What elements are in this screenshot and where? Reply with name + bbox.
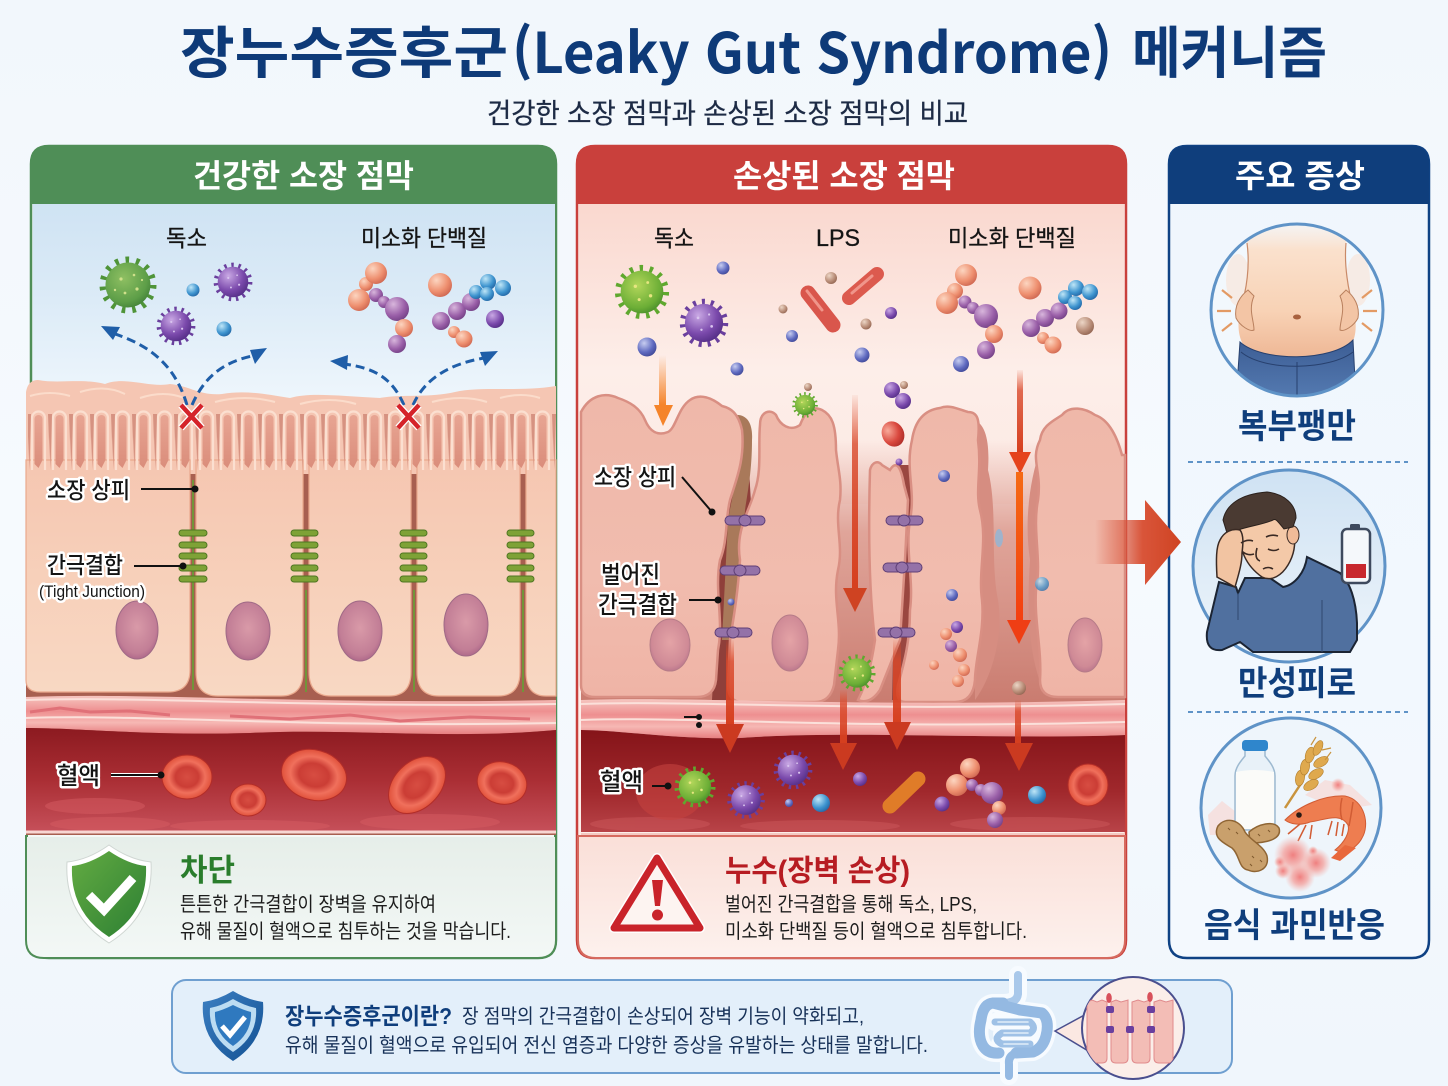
text: definition: 장 점막의 간극결합이 손상되어 장벽 기능이 약화되고, [462,1005,864,1028]
green tight strand [193,480,523,692]
pink background [579,204,1124,504]
hand [1216,529,1243,587]
layers [26,696,556,734]
illustration: abdominal bloating [1211,222,1383,400]
panel: definition [172,975,1232,1079]
panel frame [31,146,556,958]
label: toxin: 독소 [654,225,694,251]
icon: blocked X marks [181,405,419,428]
heading: symptoms [1169,146,1429,204]
label: bloating: 복부팽만 [1238,408,1356,446]
label: fatigue: 만성피로 [1238,665,1356,703]
panel frame [1169,146,1429,958]
cells [26,460,556,696]
labels: damaged diagram [594,464,722,796]
nuclei [116,594,488,661]
subtitle: 건강한 소장 점막과 손상된 소장 점막의 비교 [487,98,968,129]
particles in junction and blood [636,657,1108,828]
text: definition: 유해 물질이 혈액으로 유입되어 전신 염증과 다양한 증상을 유발하는 상태를 말합니다. [285,1034,928,1057]
tight junctions: healthy [179,530,534,582]
panel: major symptoms [1169,146,1429,958]
title [180,9,1327,90]
blood vessel [581,730,1125,832]
text: definition: 장누수증후군이란? [285,1003,452,1029]
icon: green shield [67,845,151,943]
microvilli [28,404,556,470]
icon: blue shield [203,991,263,1061]
labels: damaged diagram: 소장 상피 [594,464,676,490]
text: block description: 유해 물질이 혈액으로 침투하는 것을 막습니다. [180,920,511,943]
text: leakage description [725,893,1027,943]
labels: healthy diagram [39,477,198,790]
battery [1342,524,1370,583]
title: 장누수증후군 [180,9,508,90]
blood vessel [26,728,556,832]
panel: healthy small intestine mucosa [26,146,556,958]
labels: damaged diagram: 벌어진 [601,562,660,589]
heading: healthy [31,146,556,204]
shrimp [1285,796,1366,861]
icon: magnified callout [1055,977,1184,1079]
panel: damaged small intestine mucosa [577,146,1126,958]
text: definition [285,1003,928,1057]
labels: damaged diagram: 간극결합 [598,592,677,619]
proteins above damaged wall [929,264,1098,687]
label: undigested protein: 미소화 단백질 [948,225,1076,251]
text: block description [180,893,511,943]
callout: blocked [26,836,556,958]
sky background [33,204,555,399]
hair [1223,492,1296,533]
tissue: healthy epithelium [26,380,556,836]
text: leakage description: 미소화 단백질 등이 혈액으로 침투합니다. [725,920,1027,943]
labels: damaged diagram: 혈액 [600,769,643,796]
face [1238,515,1295,579]
labels: healthy diagram: 소장 상피 [47,477,130,503]
panel frame [577,146,1126,958]
layers [581,699,1125,738]
heading: damaged [577,146,1126,204]
arrows: deflected toxins [101,326,498,405]
labels: healthy diagram: (Tight Junction) [39,582,145,601]
title: (Leaky Gut Syndrome) [512,9,1112,90]
heading: damaged: 손상된 소장 점막 [733,158,955,194]
heading: symptoms: 주요 증상 [1235,158,1365,194]
text: block description: 튼튼한 간극결합이 장벽을 유지하여 [180,893,436,916]
tight junctions: damaged [715,515,923,638]
arrows: leakage into blood [654,355,1033,771]
callout: leakage [578,836,1125,958]
nuclei [650,615,1102,672]
tissue: damaged epithelium [581,395,1125,834]
title: 메커니즘 [1132,9,1327,90]
sweater [1207,557,1357,652]
peanuts [1216,820,1279,871]
labels: healthy diagram: 간극결합 [47,552,123,578]
icon: undigested proteins [348,262,511,353]
torn cell sliver [722,415,752,640]
wheat [1285,737,1331,808]
hives [1274,778,1345,892]
illustration: chronic fatigue [1193,470,1385,662]
icon: intestine [979,975,1047,1076]
particles above damaged wall [619,262,1049,637]
illustration: food hypersensitivity [1201,718,1381,898]
icon: toxins [104,261,249,342]
icon: warning triangle [614,858,700,928]
heading: healthy: 건강한 소장 점막 [193,158,414,194]
epithelial cells [581,395,1125,702]
arrow: damage to symptoms [1095,500,1181,585]
label: undigested protein: 미소화 단백질 [361,225,487,251]
text: leakage description: 벌어진 간극결합을 통해 독소, LPS, [725,893,977,916]
label: food hypersensitivity: 음식 과민반응 [1204,907,1385,945]
labels: healthy diagram: 혈액 [57,763,100,790]
label: LPS: LPS [816,225,860,252]
milk bottle [1235,740,1275,830]
heading: block: 차단 [180,853,235,888]
red blood cells: healthy [162,742,532,825]
heading: leakage: 누수(장벽 손상) [725,855,910,888]
label: toxin: 독소 [166,225,207,251]
